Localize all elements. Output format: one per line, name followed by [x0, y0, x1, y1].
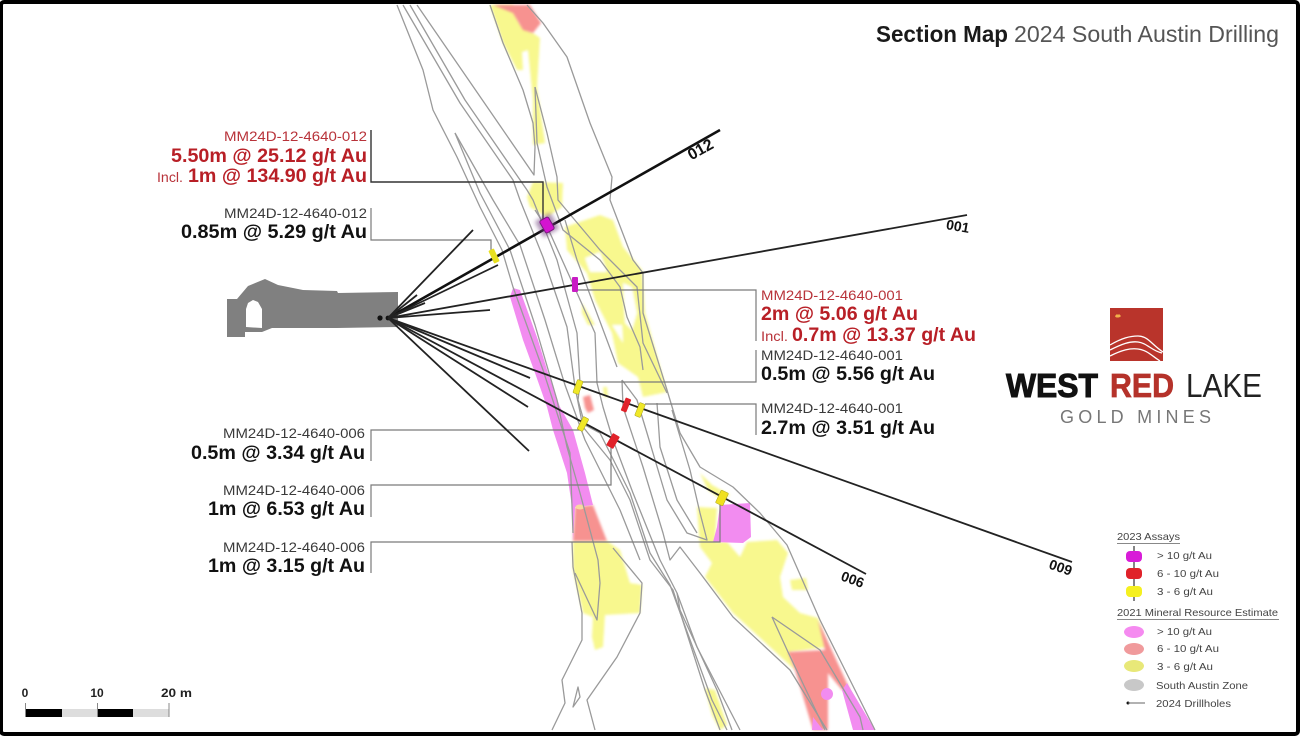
legend: resource swatches: 2024 Drillholes: [1156, 698, 1231, 710]
callout: hole 012 high grade: MM24D-12-4640-012: [224, 128, 367, 144]
callout: hole 001 high grade: Incl.: [761, 328, 788, 344]
icon: red square with waves: [1110, 308, 1163, 361]
drillhole labels: 009: [1047, 556, 1074, 579]
logo: West Red Lake Gold Mines: RED: [1110, 367, 1174, 404]
callout: hole 012 high grade: 1m @ 134.90 g/t Au: [188, 166, 367, 187]
callout: hole 001 third intercept: [761, 400, 935, 439]
callout: hole 006 third intercept: MM24D-12-4640-006: [223, 539, 365, 555]
legend: resource swatches: 3 - 6 g/t Au: [1157, 661, 1213, 673]
title: 2024 South Austin Drilling: [1014, 21, 1279, 47]
callout: hole 006 first intercept: MM24D-12-4640-006: [223, 425, 365, 441]
legend: resource swatches: 6 - 10 g/t Au: [1157, 643, 1219, 655]
callout: hole 012: [181, 205, 367, 243]
legend: [1117, 531, 1279, 710]
scale bar: 20 m: [161, 686, 192, 700]
legend: resource swatches: > 10 g/t Au: [1157, 626, 1212, 638]
logo: West Red Lake Gold Mines: GOLD MINES: [1060, 407, 1211, 427]
resource zones: 6-10 g/t Au salmon: [493, 5, 850, 730]
legend: assay symbols: > 10 g/t Au: [1157, 550, 1212, 562]
legend: drillhole symbol: [1126, 702, 1145, 704]
legend heading: 2021 Mineral Resource Estimate: 2021 Mineral Resource Estimate: [1117, 607, 1278, 619]
drillhole labels: 006: [839, 568, 867, 591]
callout: hole 001 high grade: 2m @ 5.06 g/t Au: [761, 304, 918, 325]
scale bar: 10: [90, 686, 104, 700]
legend heading: 2023 Assays: 2023 Assays: [1117, 531, 1180, 543]
drillhole labels: 001: [945, 216, 971, 236]
resource zones: above 10 g/t Au pink: [510, 288, 875, 730]
geological section map: [397, 5, 875, 730]
title: Section Map: [876, 21, 1008, 47]
scale bar: [22, 686, 192, 717]
callout: hole 001 third intercept: MM24D-12-4640-001: [761, 400, 903, 416]
legend: assay symbols: [1126, 546, 1219, 601]
callout: hole 006 second intercept: [208, 482, 365, 520]
logo: West Red Lake Gold Mines: LAKE: [1186, 367, 1262, 404]
cream spot in pink zone: [576, 504, 584, 510]
callout: hole 001 second intercept: 0.5m @ 5.56 g/t Au: [761, 364, 935, 385]
drillholes: [388, 130, 1072, 574]
callout: hole 001 high grade: MM24D-12-4640-001: [761, 287, 903, 303]
resource zones: 3-6 g/t Au yellow: [490, 5, 827, 730]
drillhole labels: [685, 136, 1074, 591]
callout: hole 001 third intercept: 2.7m @ 3.51 g/t Au: [761, 418, 935, 439]
leader lines: [371, 130, 756, 573]
callout: hole 012: 0.85m @ 5.29 g/t Au: [181, 222, 367, 243]
logo: West Red Lake Gold Mines: [1006, 308, 1262, 427]
callout: hole 001 second intercept: [761, 347, 935, 385]
underground workings: [227, 279, 398, 337]
scale bar: 0: [22, 686, 29, 700]
assay intercept markers: [488, 213, 729, 506]
callout: hole 006 first intercept: [191, 425, 365, 464]
callout: hole 006 second intercept: 1m @ 6.53 g/t Au: [208, 499, 365, 520]
callout: hole 006 second intercept: MM24D-12-4640-006: [223, 482, 365, 498]
legend: resource swatches: South Austin Zone: [1156, 680, 1248, 692]
callout: hole 012 high grade: Incl.: [157, 169, 183, 185]
legend: assay symbols: 6 - 10 g/t Au: [1157, 568, 1219, 580]
callout: hole 001 high grade: 0.7m @ 13.37 g/t Au: [792, 325, 976, 346]
callout: hole 012: MM24D-12-4640-012: [224, 205, 367, 221]
legend: assay symbols: 3 - 6 g/t Au: [1157, 586, 1213, 598]
callout: hole 001 high grade: [761, 287, 976, 346]
callout: hole 006 first intercept: 0.5m @ 3.34 g/t Au: [191, 443, 365, 464]
title: [876, 21, 1279, 47]
South Austin Zone outlines: [397, 5, 875, 730]
logo: West Red Lake Gold Mines: WEST: [1006, 367, 1098, 404]
callout: hole 001 second intercept: MM24D-12-4640-001: [761, 347, 903, 363]
callout: hole 012 high grade: [157, 128, 367, 187]
callout: hole 012 high grade: 5.50m @ 25.12 g/t Au: [171, 146, 367, 167]
legend: resource swatches: [1124, 626, 1248, 710]
callout: hole 006 third intercept: [208, 539, 365, 577]
callout: hole 006 third intercept: 1m @ 3.15 g/t Au: [208, 556, 365, 577]
drillhole labels: 012: [685, 136, 717, 164]
